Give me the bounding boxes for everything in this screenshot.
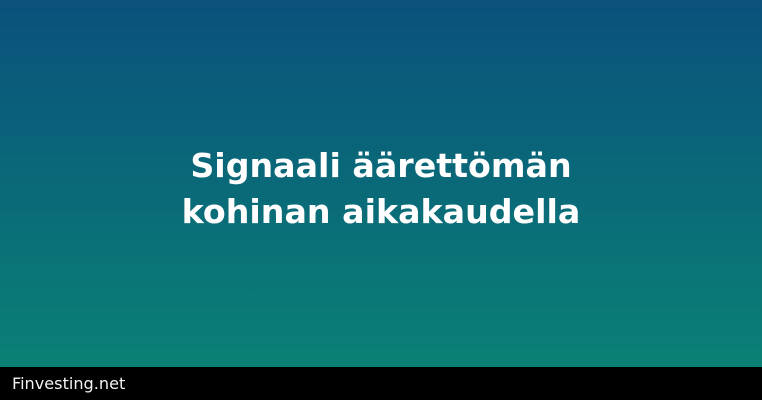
footer bar (0, 367, 762, 400)
title (182, 146, 580, 231)
title: Signaali äärettömän (190, 146, 572, 185)
title: kohinan aikakaudella (182, 192, 580, 231)
brand name: Finvesting.net (12, 374, 125, 393)
